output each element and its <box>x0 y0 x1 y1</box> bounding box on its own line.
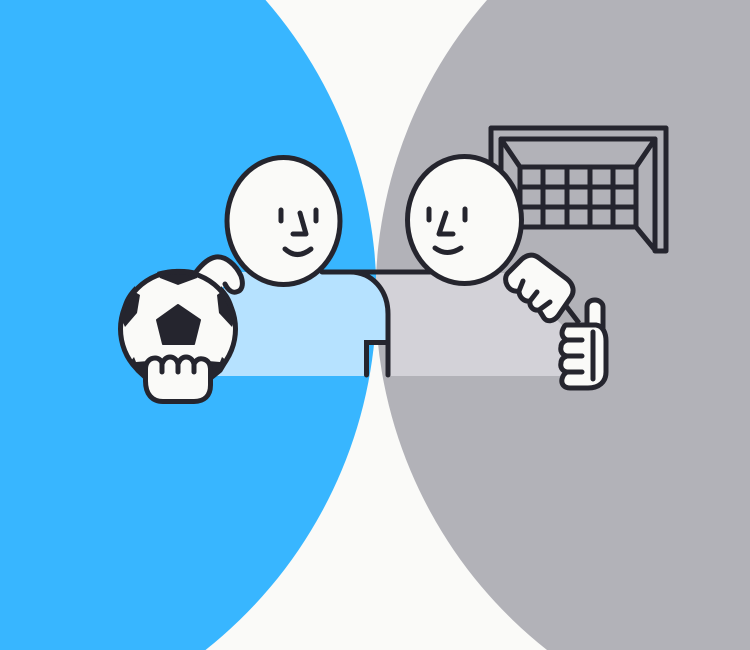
arm line of right friend <box>566 306 579 323</box>
blue circle background <box>0 0 377 650</box>
hand on right shoulder <box>506 255 573 321</box>
grey circle background <box>375 0 750 650</box>
right head <box>408 156 522 284</box>
blue shirt <box>215 272 388 376</box>
goal <box>491 128 666 251</box>
football <box>120 269 236 386</box>
shoulder and sleeve outline <box>322 272 440 375</box>
right face <box>429 209 465 252</box>
ball patches <box>121 269 235 385</box>
grey shirt <box>376 273 582 376</box>
thumbs up hand <box>561 300 606 388</box>
left head <box>227 158 340 284</box>
fist holding ball <box>146 357 210 402</box>
hand on left shoulder <box>190 257 242 295</box>
left face <box>281 210 316 254</box>
